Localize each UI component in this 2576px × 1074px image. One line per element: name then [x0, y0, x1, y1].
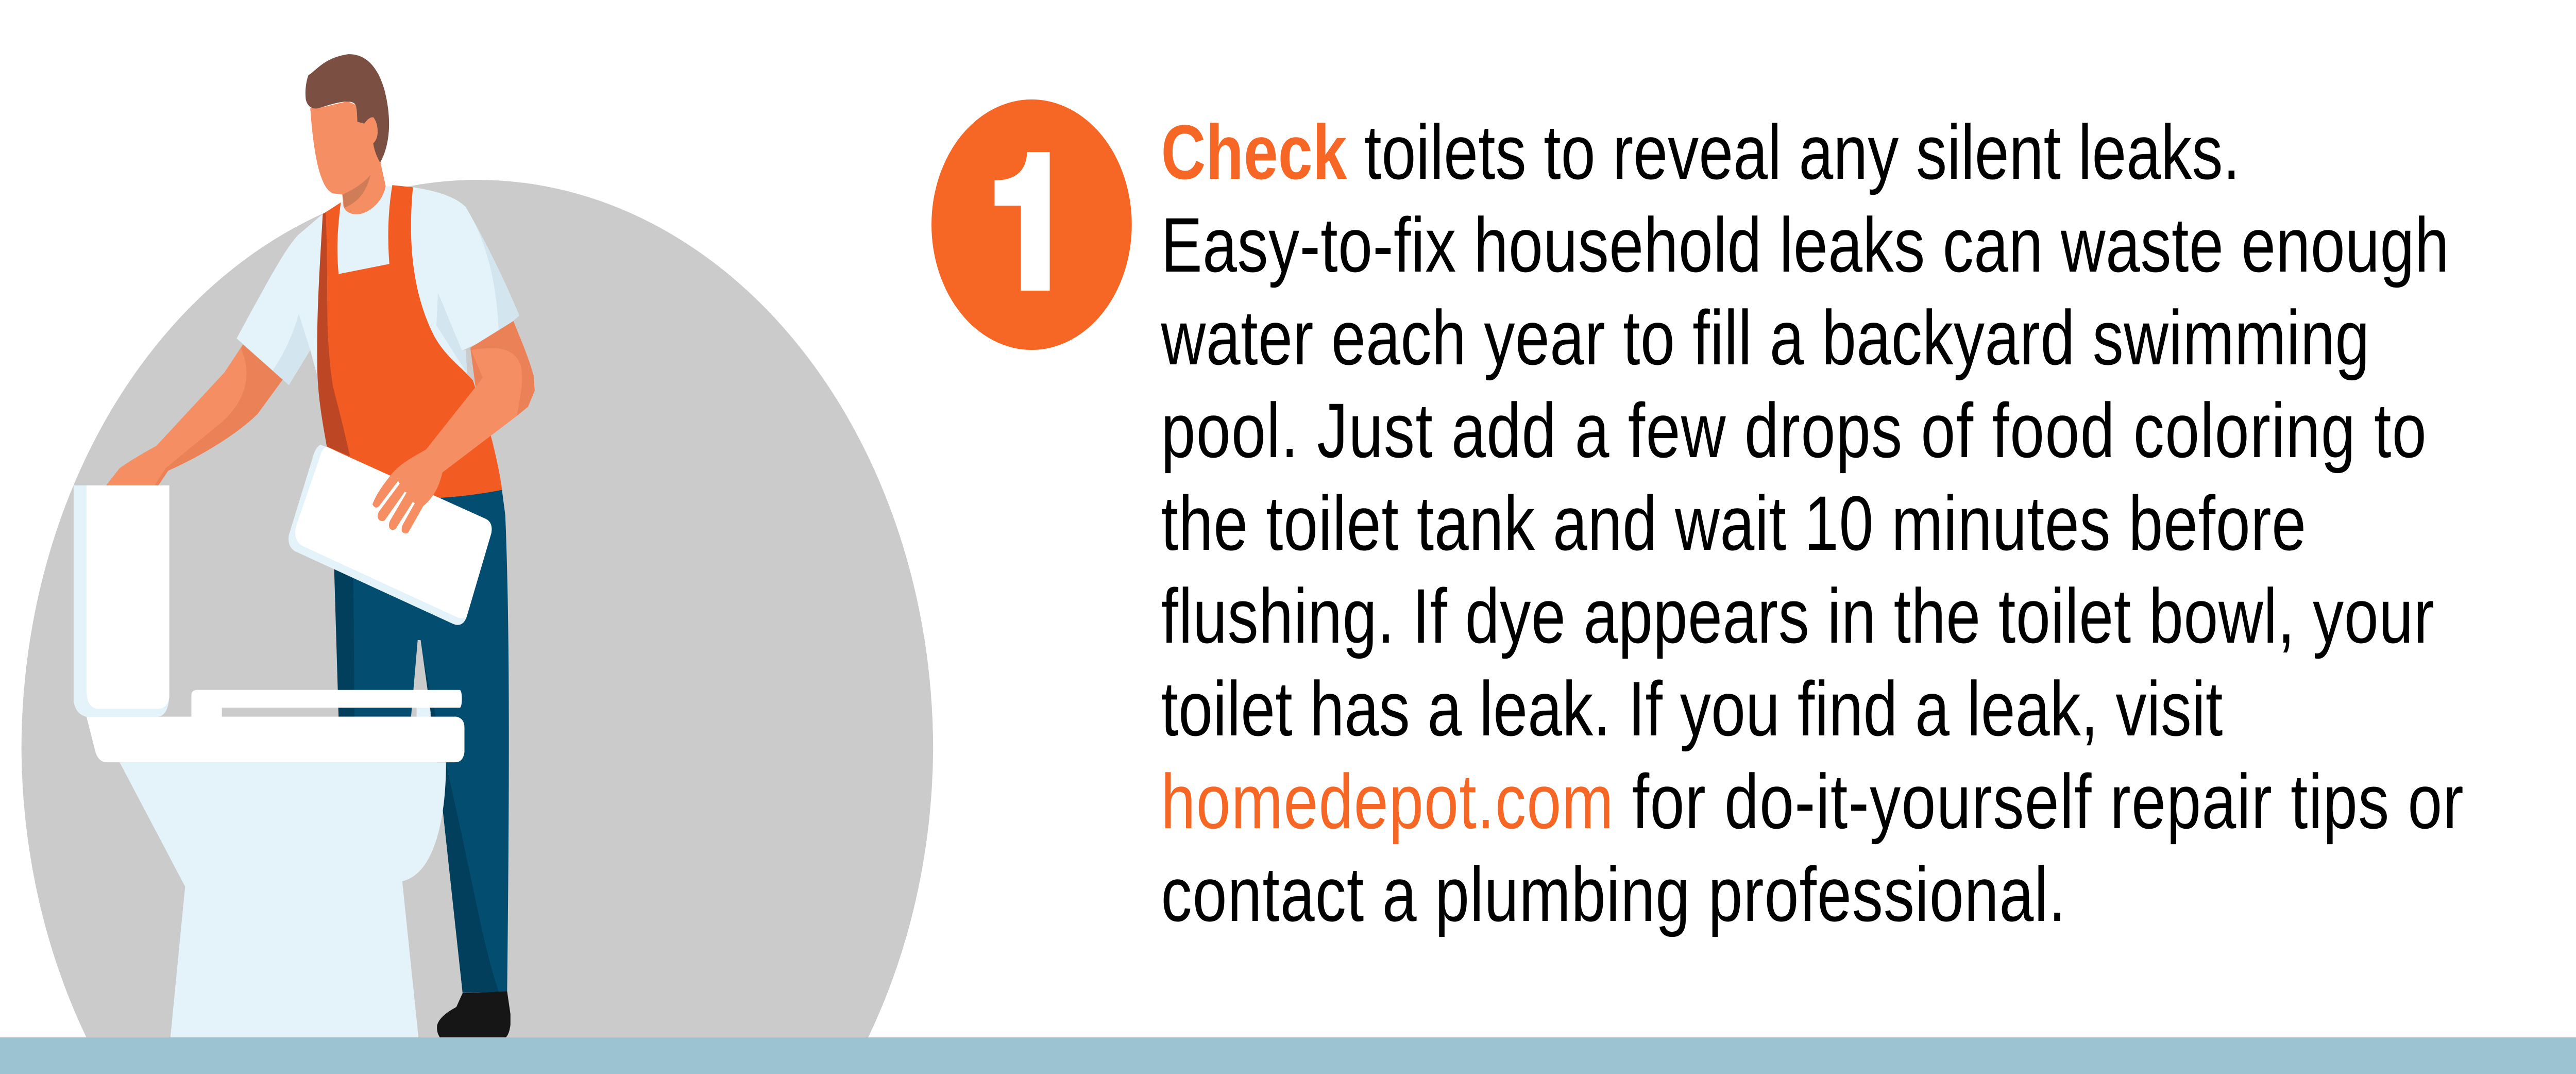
toilet seat gap detail: [417, 707, 430, 718]
toilet tank: [74, 485, 170, 717]
plumber left arm reaching into tank: [106, 345, 283, 485]
body text: pool. Just add a few drops of food coloring to: [1161, 387, 2427, 474]
body text: Easy-to-fix household leaks can waste enough: [1161, 202, 2449, 288]
body text: the toilet tank and wait 10 minutes before: [1161, 480, 2306, 566]
plumber trousers: [334, 490, 509, 993]
body text: Check toilets to reveal any silent leaks.: [1161, 109, 2240, 195]
step number badge: 1: [983, 109, 1073, 334]
body text: flushing. If dye appears in the toilet bowl, your: [1161, 573, 2434, 659]
body text: [1161, 109, 2464, 937]
plumber apron: [317, 185, 502, 498]
body text: toilet has a leak. If you find a leak, visit: [1161, 665, 2223, 752]
toilet tank lid held by plumber: [289, 445, 492, 625]
step number badge: [931, 99, 1132, 350]
plumber hair: [306, 54, 389, 163]
body text: water each year to fill a backyard swimming: [1161, 294, 2369, 381]
body text: homedepot.com for do-it-yourself repair tips or: [1161, 758, 2464, 845]
plumber right arm and hand: [372, 321, 535, 533]
illustration: plumber at toilet: [74, 54, 535, 1037]
floor band: [0, 1037, 2576, 1074]
plumber shirt: [236, 186, 519, 398]
toilet bowl: [120, 762, 446, 1037]
plumber shoe: [437, 992, 511, 1037]
background grey circle: [22, 180, 933, 1074]
body text: contact a plumbing professional.: [1161, 851, 2066, 937]
toilet seat: [191, 690, 462, 717]
toilet: [74, 485, 464, 1037]
toilet rim: [87, 717, 464, 762]
plumber head and neck: [310, 101, 386, 214]
